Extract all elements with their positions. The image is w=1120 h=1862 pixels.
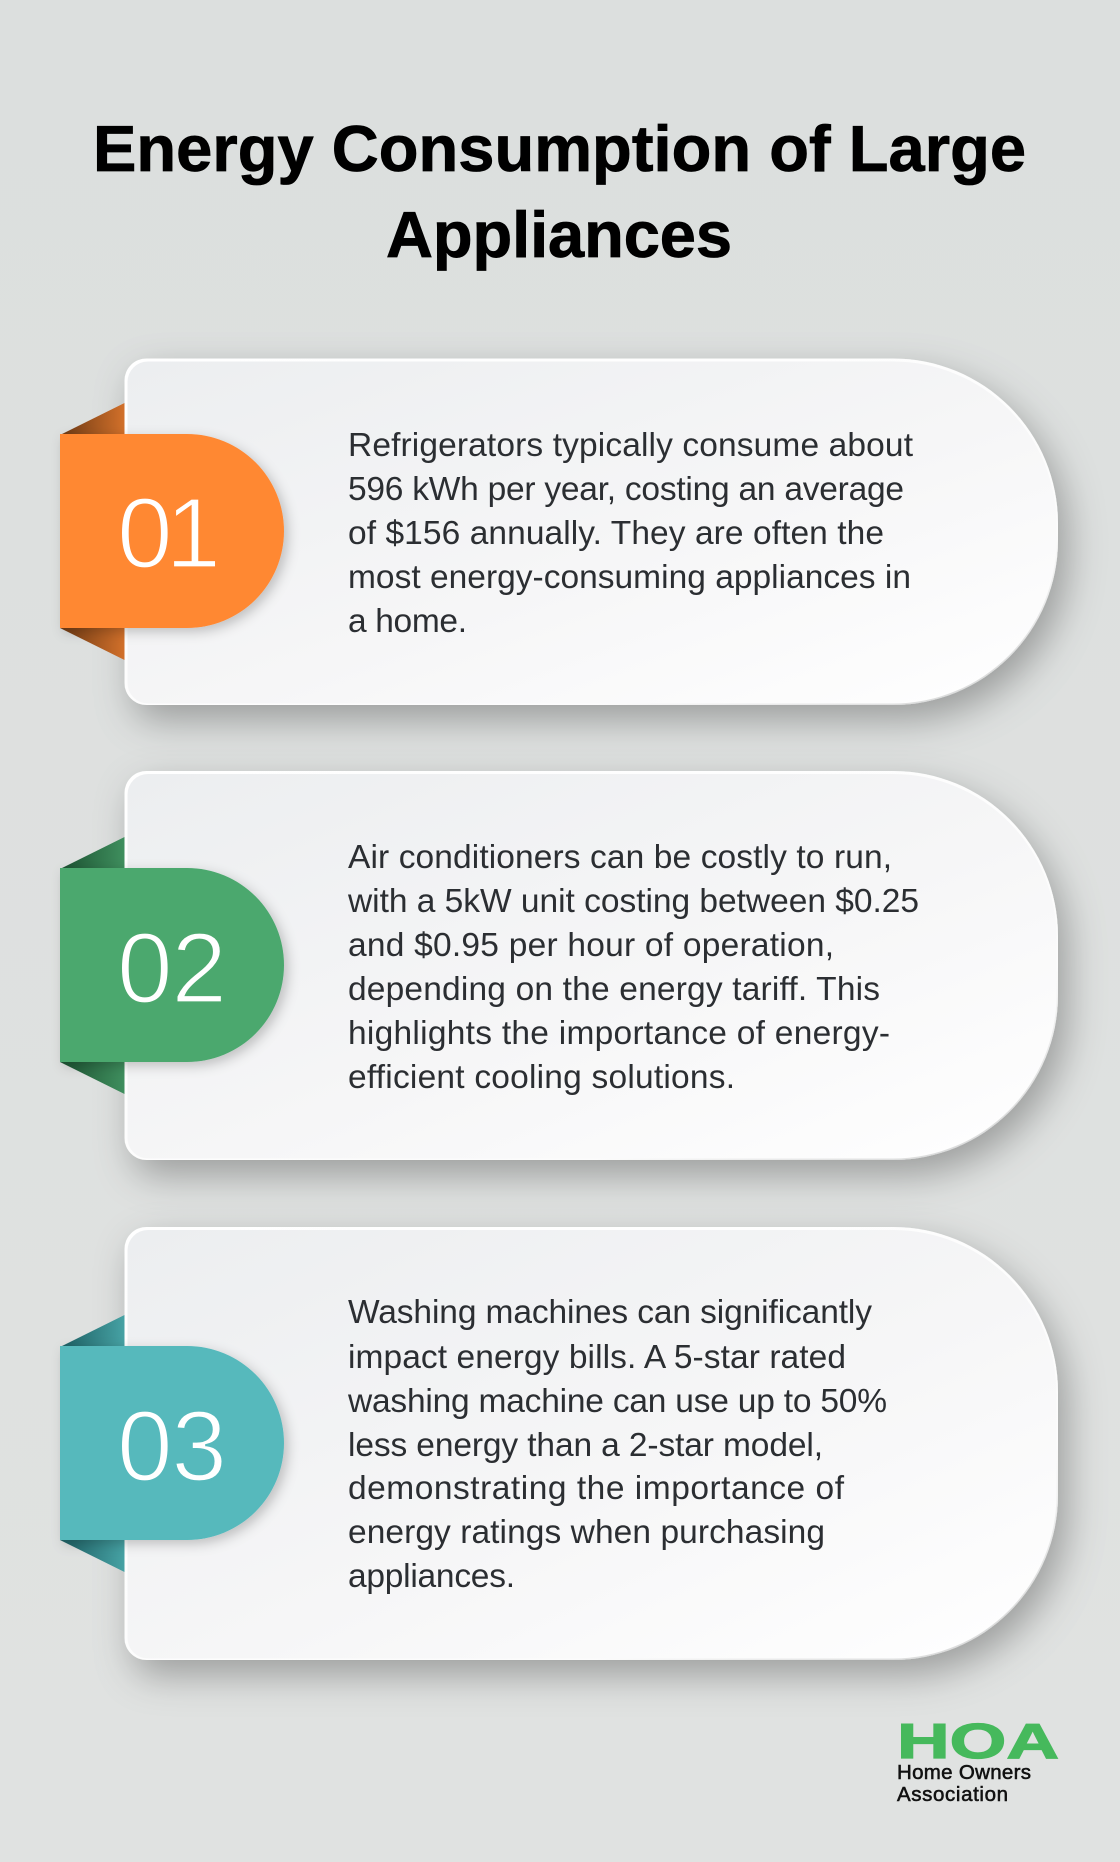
- ribbon fold top: [62, 1315, 124, 1346]
- description text: most energy-consuming appliances in: [348, 559, 911, 596]
- logo: HOA Home Owners Association: [897, 1714, 1059, 1806]
- title: Energy Consumption of Large: [93, 112, 1026, 185]
- description text: demonstrating the importance of: [348, 1470, 845, 1507]
- logo: HOA Home Owners Association: HOA: [897, 1714, 1059, 1769]
- title: [93, 112, 1026, 271]
- description text: impact energy bills. A 5-star rated: [348, 1339, 846, 1376]
- description text: [348, 427, 914, 640]
- panel: washing machines: [60, 1227, 1058, 1660]
- description text: washing machine can use up to 50%: [347, 1383, 887, 1420]
- logo: HOA Home Owners Association: Association: [897, 1783, 1008, 1806]
- ribbon fold bottom: [60, 1540, 124, 1572]
- description text: of $156 annually. They are often the: [348, 515, 884, 552]
- number badge: [60, 1346, 284, 1540]
- description text: energy ratings when purchasing: [348, 1514, 825, 1551]
- description text: a home.: [348, 603, 467, 640]
- logo: HOA Home Owners Association: Home Owners: [897, 1761, 1031, 1784]
- description text: and $0.95 per hour of operation,: [348, 927, 834, 964]
- description text: with a 5kW unit costing between $0.25: [347, 883, 919, 920]
- card background: [124, 1227, 1058, 1660]
- number badge: 01: [117, 478, 221, 590]
- description text: efficient cooling solutions.: [348, 1059, 735, 1096]
- number badge: 02: [117, 912, 227, 1024]
- description text: Washing machines can significantly: [348, 1294, 872, 1331]
- card background: [124, 771, 1058, 1160]
- ribbon fold top: [62, 403, 124, 434]
- panel: air conditioners: [60, 771, 1058, 1160]
- ribbon fold bottom: [60, 1062, 124, 1094]
- panel: refrigerators: [60, 358, 1058, 705]
- number badge: [60, 868, 284, 1062]
- card background: [124, 358, 1058, 705]
- description text: depending on the energy tariff. This: [348, 971, 880, 1008]
- title: Appliances: [386, 198, 732, 271]
- description text: less energy than a 2-star model,: [348, 1427, 823, 1464]
- ribbon fold bottom: [60, 628, 124, 660]
- description text: 596 kWh per year, costing an average: [348, 471, 904, 508]
- description text: Air conditioners can be costly to run,: [348, 839, 892, 876]
- ribbon fold top: [62, 837, 124, 868]
- number badge: [60, 434, 284, 628]
- number badge: 03: [117, 1390, 227, 1502]
- description text: highlights the importance of energy-: [348, 1015, 890, 1052]
- description text: Refrigerators typically consume about: [348, 427, 914, 464]
- description text: [347, 839, 919, 1096]
- description text: appliances.: [348, 1558, 515, 1595]
- description text: [347, 1294, 887, 1595]
